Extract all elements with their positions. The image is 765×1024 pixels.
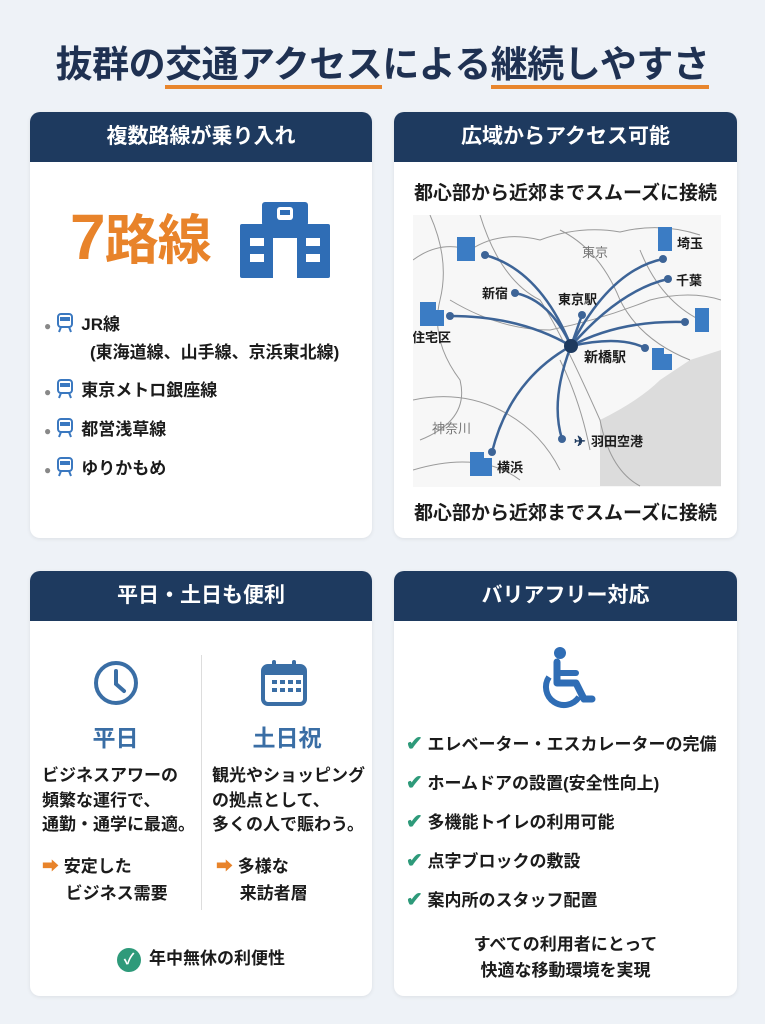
icon: station building (240, 202, 330, 278)
footer text (474, 935, 657, 980)
map: 埼玉 (677, 236, 703, 251)
text: ビジネスアワーの (42, 766, 178, 785)
footer text: すべての利用者にとって (474, 935, 657, 954)
item: Yurikamome: ● ゆりかもめ (44, 459, 166, 478)
result: ➡ 多様な (216, 857, 289, 876)
label: 土日祝 (252, 725, 322, 751)
text: 多くの人で賑わう。 (212, 815, 364, 834)
icon: wheelchair (542, 647, 596, 708)
panel: multiple lines (30, 112, 372, 538)
heading: 広域からアクセス可能 (461, 125, 670, 148)
item: Asakusa: ● 都営浅草線 (44, 420, 166, 439)
text: の拠点として、 (212, 790, 330, 810)
footer text: 快適な移動環境を実現 (480, 961, 650, 980)
divider (201, 655, 202, 910)
result (216, 857, 308, 903)
icon: clock (94, 661, 138, 705)
map: 横浜 (497, 460, 523, 475)
heading (30, 112, 372, 162)
text: 頻繁な運行で、 (42, 790, 160, 810)
icon: calendar (261, 660, 307, 706)
text (42, 766, 195, 834)
subtitle bottom: 都心部から近郊までスムーズに接続 (414, 503, 717, 524)
map: 東京 (582, 245, 608, 260)
map: 神奈川 (432, 421, 471, 436)
checklist: ✔ エレベーター・エスカレーターの完備 (406, 733, 716, 755)
heading (30, 571, 372, 621)
line list (44, 313, 339, 478)
column: weekday (42, 661, 195, 903)
item: Ginza: ● 東京メトロ銀座線 (44, 381, 217, 400)
heading (394, 571, 737, 621)
column: weekend (212, 660, 365, 903)
heading: 平日・土日も便利 (117, 584, 285, 607)
line list: (東海道線、山手線、京浜東北線) (90, 343, 339, 362)
checklist: ✔ 点字ブロックの敷設 (406, 850, 580, 872)
heading: 複数路線が乗り入れ (106, 125, 296, 148)
map: ✈ (574, 433, 586, 449)
checklist: ✔ 多機能トイレの利用可能 (406, 811, 614, 833)
label: 平日 (92, 725, 138, 751)
panel: barrier-free (394, 571, 737, 996)
text (212, 766, 365, 834)
footer check: 年中無休の利便性 (149, 949, 285, 968)
checklist (406, 733, 716, 911)
item: JR: ● JR線 (44, 315, 120, 334)
text: 通勤・通学に最適。 (42, 815, 195, 834)
title: 抜群の交通アクセスによる継続しやすさ (56, 44, 709, 85)
panel: weekdays & weekends (30, 571, 372, 996)
footer check (117, 948, 285, 972)
subtitle top: 都心部から近郊までスムーズに接続 (414, 183, 717, 204)
map: 住宅区 (413, 330, 451, 345)
map (413, 215, 721, 486)
map: 新橋駅 (584, 349, 626, 365)
map: 東京駅 (558, 292, 597, 307)
panel: wide-area access (394, 112, 737, 538)
result: 来訪者層 (240, 884, 308, 903)
map: 千葉 (676, 273, 702, 288)
result (42, 857, 168, 903)
result: ➡ 安定した (42, 857, 132, 876)
map: 新宿 (482, 286, 508, 301)
map: 羽田空港 (591, 434, 643, 449)
checklist: ✔ ホームドアの設置(安全性向上) (406, 772, 659, 794)
footer check: ✓ (124, 951, 134, 968)
heading: バリアフリー対応 (482, 584, 650, 607)
big number: 7路線 (70, 201, 211, 273)
checklist: ✔ 案内所のスタッフ配置 (406, 889, 598, 911)
heading (394, 112, 737, 162)
text: 観光やショッピング (212, 766, 365, 785)
result: ビジネス需要 (66, 884, 168, 903)
